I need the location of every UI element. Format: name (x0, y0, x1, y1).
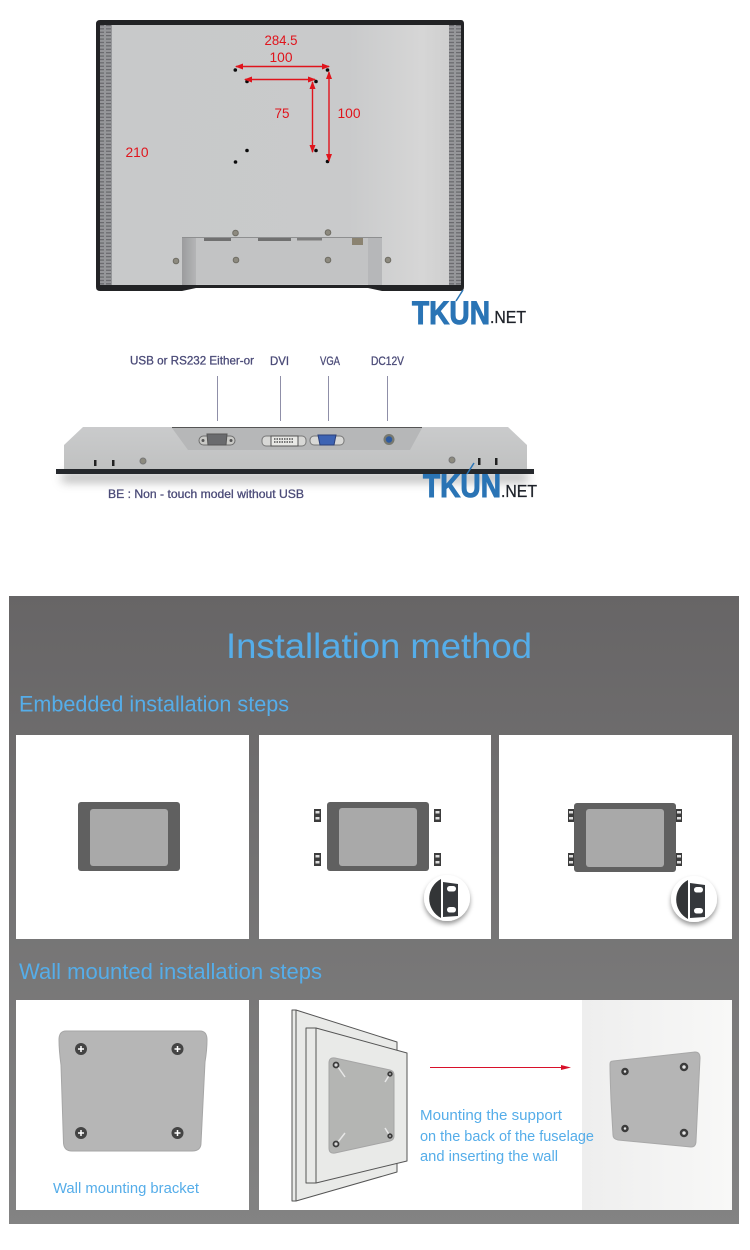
instruction text: Mounting the support (420, 1107, 563, 1124)
serial port (199, 434, 235, 445)
footnote: BE : Non - touch model without USB (108, 487, 304, 501)
card: wall mounting bracket (16, 1000, 249, 1210)
VGA port (310, 435, 344, 445)
instruction text: and inserting the wall (420, 1148, 558, 1165)
card: wall mount procedure (259, 1000, 732, 1210)
case screws (173, 230, 391, 264)
instruction text: on the back of the fuselage (420, 1128, 594, 1145)
instruction text (420, 1107, 594, 1165)
leader lines (218, 376, 388, 421)
dimension arrows (236, 66, 329, 161)
bracket screws (75, 1043, 184, 1139)
icon: bracket detail (671, 876, 717, 922)
perspective monitor drawing (292, 1010, 407, 1201)
panel: installation method (9, 596, 739, 1224)
logo: TKUN.NET top (412, 290, 526, 331)
caption: Wall mounting bracket (53, 1180, 200, 1197)
DVI port (262, 436, 306, 446)
wall bracket screws (622, 1064, 687, 1136)
logo: TKUN.NET top: TKUN (412, 295, 490, 331)
pins (338, 1067, 390, 1142)
wall background (582, 1000, 732, 1210)
logo: TKUN.NET bottom: TKUN (423, 468, 501, 504)
port labels: USB or RS232 Either-or (130, 354, 254, 368)
port labels: VGA (320, 354, 340, 368)
dimension labels: 100 (338, 106, 360, 121)
dimension labels: 284.5 (264, 33, 298, 48)
card: embedded step 2 (259, 735, 491, 939)
logo: TKUN.NET bottom: .NET (501, 481, 537, 501)
dimension labels: 100 (270, 50, 292, 65)
side view of monitor with connector ports (56, 354, 534, 501)
title: Installation method (226, 627, 532, 666)
chassis (64, 427, 527, 469)
port labels: DC12V (371, 354, 404, 368)
port labels (130, 354, 404, 368)
dimension labels: 75 (274, 106, 290, 121)
heading: wall mounted installation steps: Wall mounted installation steps (19, 959, 322, 984)
logo: TKUN.NET top: .NET (490, 307, 526, 327)
logo: TKUN.NET bottom (423, 463, 537, 504)
bracket on wall (610, 1052, 700, 1147)
DC power jack (384, 434, 394, 445)
loose brackets (314, 809, 441, 866)
I/O recess (182, 238, 382, 285)
VESA holes (234, 68, 329, 164)
dimension labels (126, 33, 360, 160)
heading: embedded installation steps: Embedded installation steps (19, 692, 289, 716)
slots and screws (94, 458, 498, 466)
arrow (430, 1065, 571, 1070)
port labels: DVI (270, 354, 289, 368)
attached brackets (568, 809, 682, 866)
dimension labels: 210 (126, 145, 148, 160)
card: embedded step 3 (499, 735, 732, 939)
icon: bracket detail (424, 875, 470, 921)
rear view of monitor with mounting dimensions (96, 20, 464, 291)
monitor rear casing (96, 20, 464, 291)
bracket plate (59, 1031, 207, 1151)
card: embedded step 1 (16, 735, 249, 939)
